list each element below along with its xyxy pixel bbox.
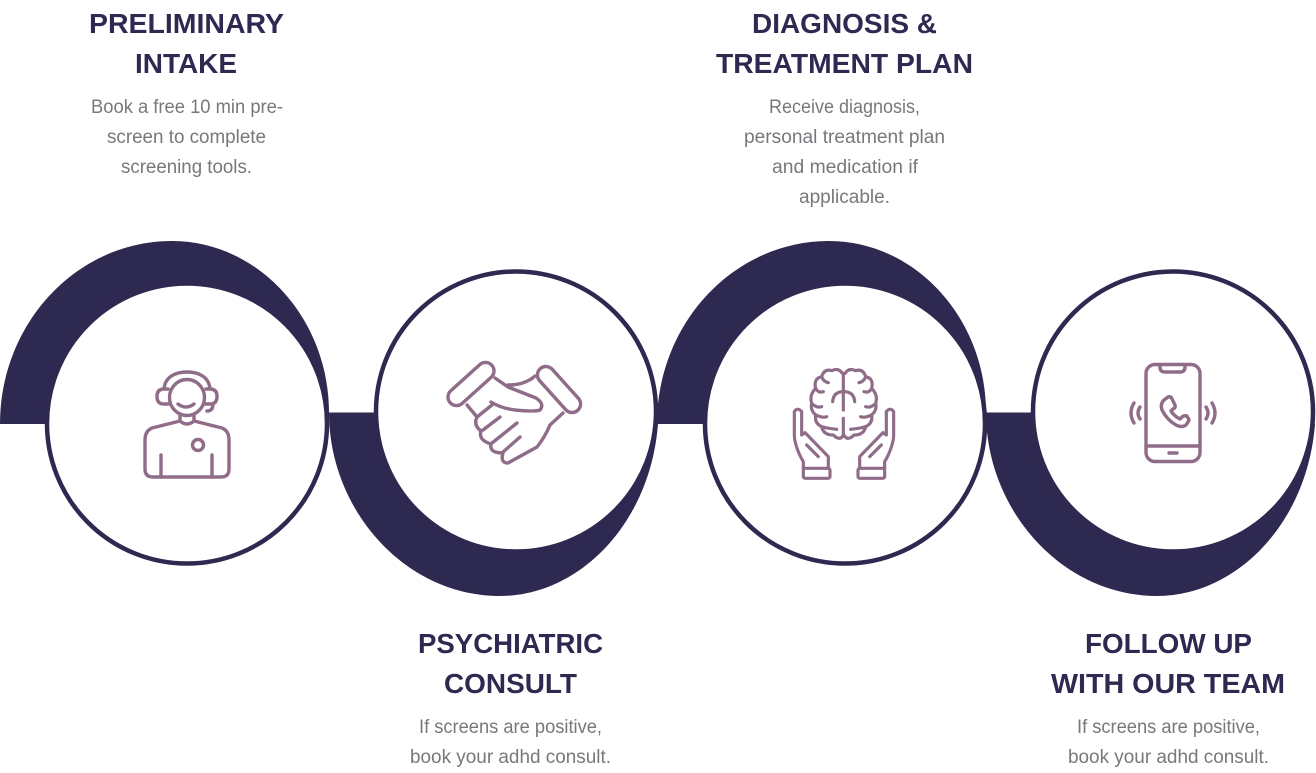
- description: diagnosis and treatment plan: Receive diagnosis,: [769, 97, 920, 118]
- heading: psychiatric consult: CONSULT: [444, 668, 577, 699]
- circle: step 4: [1033, 272, 1313, 552]
- description: preliminary intake: Book a free 10 min pre-: [91, 97, 283, 118]
- description: diagnosis and treatment plan: applicable.: [799, 187, 890, 208]
- crescent: step 3: [657, 241, 986, 424]
- crescent: step 2: [329, 412, 658, 596]
- description: psychiatric consult: [410, 717, 611, 768]
- text block: preliminary intake: [89, 8, 284, 178]
- icon: handshake: [445, 359, 584, 463]
- connector: step 2 to step 3: [655, 405, 707, 424]
- description: follow up with our team: [1068, 717, 1269, 768]
- crescent: step 4: [986, 412, 1315, 596]
- crescent: step 1: [0, 241, 329, 424]
- heading: diagnosis and treatment plan: DIAGNOSIS &: [752, 8, 937, 39]
- heading: follow up with our team: WITH OUR TEAM: [1051, 668, 1285, 699]
- heading: diagnosis and treatment plan: [716, 8, 973, 79]
- circle: step 3: [705, 284, 985, 564]
- heading: follow up with our team: [1051, 628, 1285, 699]
- text block: follow up with our team: [1051, 628, 1285, 768]
- description: diagnosis and treatment plan: [744, 97, 945, 208]
- description: diagnosis and treatment plan: personal treatment plan: [744, 127, 945, 148]
- circle: step 2: [376, 272, 656, 552]
- description: follow up with our team: If screens are positive,: [1077, 717, 1260, 738]
- description: follow up with our team: book your adhd consult.: [1068, 747, 1269, 768]
- heading: psychiatric consult: [418, 628, 603, 699]
- heading: preliminary intake: INTAKE: [135, 48, 237, 79]
- description: psychiatric consult: If screens are positive,: [419, 717, 602, 738]
- description: preliminary intake: screen to complete: [107, 127, 266, 148]
- circle: step 1: [47, 284, 327, 564]
- text block: diagnosis and treatment plan: [716, 8, 973, 208]
- heading: follow up with our team: FOLLOW UP: [1085, 628, 1252, 659]
- description: preliminary intake: screening tools.: [121, 157, 252, 178]
- heading: diagnosis and treatment plan: TREATMENT PLAN: [716, 48, 973, 79]
- description: preliminary intake: [91, 97, 283, 178]
- heading: psychiatric consult: PSYCHIATRIC: [418, 628, 603, 659]
- heading: preliminary intake: [89, 8, 284, 79]
- description: psychiatric consult: book your adhd consult.: [410, 747, 611, 768]
- icon: brain held by two hands: [794, 369, 894, 478]
- description: diagnosis and treatment plan: and medication if: [772, 157, 919, 178]
- icon: smartphone with ringing call: [1131, 364, 1215, 462]
- heading: preliminary intake: PRELIMINARY: [89, 8, 284, 39]
- text block: psychiatric consult: [410, 628, 611, 768]
- icon: support agent with headset: [145, 372, 229, 477]
